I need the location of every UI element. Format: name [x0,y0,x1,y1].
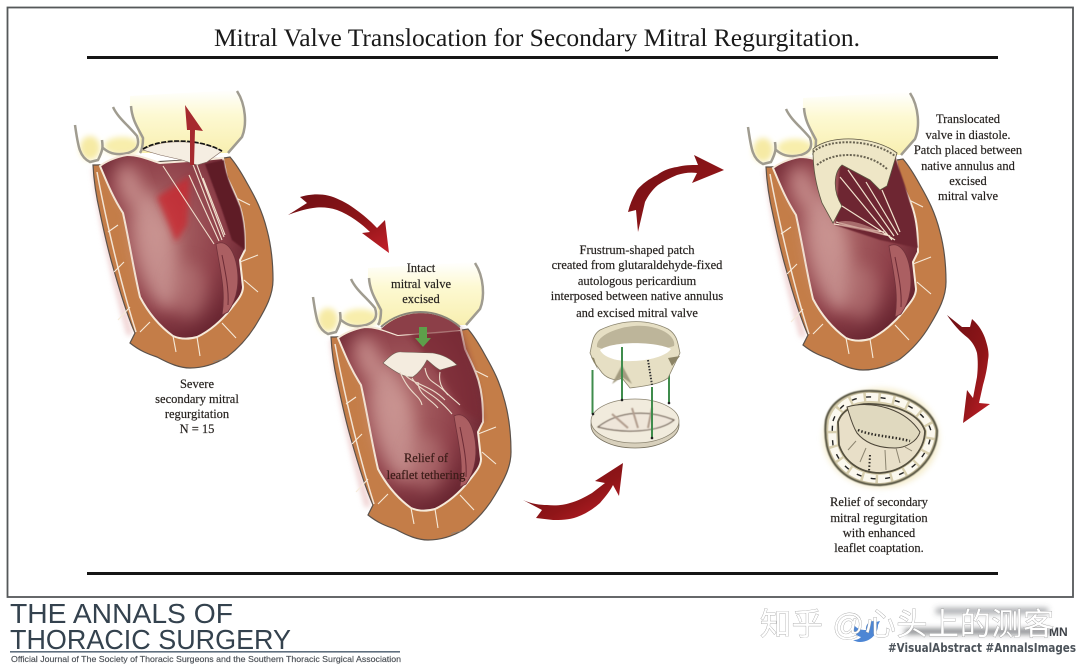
dark lateral cavity [205,160,245,250]
excised valve leaflets [383,352,460,414]
heart 1: severe secondary mitral regurgitation [75,90,273,368]
suture dots [592,399,670,439]
caption: relief of tethering [387,451,466,482]
bottom rule [87,572,998,575]
caption: severe regurgitation: secondary mitral [155,392,239,406]
caption: translocated valve [914,112,1023,203]
obscured credit lines [905,608,1050,634]
caption: frustum patch [551,243,723,320]
darker right cavity [408,328,483,422]
caption: severe regurgitation: Severe [180,377,214,391]
heart 3: translocated valve in diastole [748,92,946,370]
caption: frustum patch: created from glutaraldehyde-fixed [552,258,723,272]
caption: relief of regurgitation: Relief of secondary [830,495,929,509]
caption: frustum patch: interposed between native annulus [551,289,723,303]
caption: intact valve excised: mitral valve [391,277,451,291]
caption: relief of regurgitation: leaflet coaptation. [834,541,924,555]
caption: relief of regurgitation: mitral regurgitation [830,511,928,525]
warm glow behind ring [823,388,939,488]
caption: frustum patch: autologous pericardium [578,274,696,288]
caption: frustum patch: and excised mitral valve [576,306,698,320]
journal logo: Official Journal of The Society of Thoracic Surgeons and the Southern Thoracic Surgical Association [11,654,401,664]
caption: relief of regurgitation [830,495,929,555]
caption: translocated valve: excised [949,174,987,188]
patch illustration [590,322,680,448]
watermark: 知乎 @心头上的测客 [760,607,1054,642]
dark opening [835,155,918,248]
caption: intact valve excised: Intact [407,261,436,275]
upper frustum ring [590,322,680,388]
caption: translocated valve: valve in diastole. [925,128,1011,142]
suture bands [813,142,895,170]
caption: severe regurgitation [155,377,239,436]
patch chordae [834,170,900,240]
journal logo: THE ANNALS OF [10,598,233,629]
cream patch [813,139,897,223]
caption: intact valve excised: excised [402,292,440,306]
journal logo: THORACIC SURGERY [10,624,291,655]
lower disc [591,399,679,448]
green down arrow [415,327,431,347]
regurgitant jet [157,176,190,242]
curved arrow 2 [523,463,623,520]
title rule [87,56,998,59]
sutured ring [825,391,937,485]
caption: translocated valve: mitral valve [938,189,998,203]
title: Mitral Valve Translocation for Secondary Mitral Regurgitation. [214,23,860,52]
posterior scallops [848,441,912,470]
curved arrow 1 [288,194,389,253]
caption: relief of tethering: Relief of [404,451,449,465]
annulus valve view [823,388,939,488]
caption: translocated valve: Translocated [936,112,1001,126]
curved arrow 4 [947,315,990,423]
anterior leaflet [847,405,920,448]
coaptation sutures [858,430,910,441]
green guide lines behind band [592,370,669,438]
annulus dome [381,313,460,335]
leaflets and dashed annulus [143,141,222,165]
pale tissue under patch [838,221,886,236]
translocated valve patch [813,139,918,248]
caption: frustum patch: Frustrum-shaped patch [580,243,695,257]
caption: translocated valve: native annulus and [921,159,1016,173]
chordae [163,162,225,244]
heart 2: valve excised [313,262,511,540]
curved arrow 3 [628,155,724,232]
caption: severe regurgitation: N = 15 [180,422,214,436]
caption: relief of regurgitation: with enhanced [843,526,916,540]
caption: intact valve excised [391,261,451,306]
free chordae [400,368,460,414]
green guide line through ring [621,347,623,400]
red upward arrow [185,105,203,165]
journal logo [10,598,401,664]
icon: twitter bird [853,621,880,642]
social credit block [853,608,1076,655]
caption: translocated valve: Patch placed between [914,143,1023,157]
credit line ending: MN [1049,625,1068,639]
caption: relief of tethering: leaflet tethering [387,468,466,482]
caption: severe regurgitation: regurgitation [165,407,230,421]
